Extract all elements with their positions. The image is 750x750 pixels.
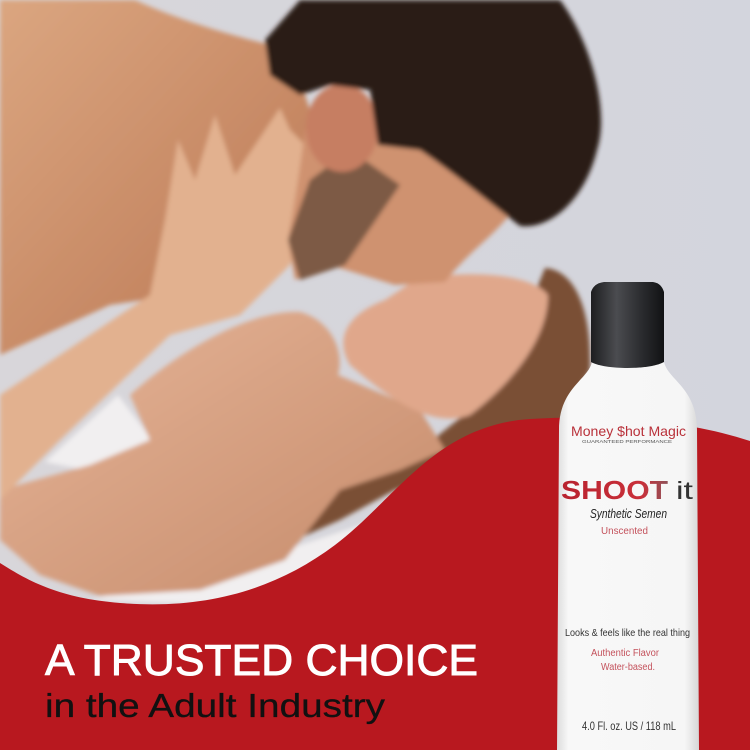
arm, lower figure <box>0 108 318 500</box>
photo: abstract colour masses <box>0 0 601 605</box>
long brown hair <box>295 268 590 540</box>
volume: 4.0 Fl. oz. US / 118 mL <box>582 719 676 733</box>
brand name: Money $hot Magic <box>571 423 686 439</box>
base label: Water-based. <box>601 662 655 673</box>
flavor label: Authentic Flavor <box>591 648 660 659</box>
beard <box>288 150 400 280</box>
product type: Synthetic Semen <box>590 506 667 521</box>
ear <box>306 84 378 172</box>
subheading: in the Adult Industry <box>45 687 386 724</box>
short dark hair <box>265 0 601 226</box>
product name: SHOOT <box>561 475 668 505</box>
torso and neck, lower figure <box>0 312 445 596</box>
bottle cap <box>591 282 664 368</box>
headline: A TRUSTED CHOICE <box>45 636 478 685</box>
bottle body <box>557 362 699 750</box>
product bottle <box>557 282 699 750</box>
product name suffix: it <box>676 477 693 505</box>
bed sheet <box>45 395 370 605</box>
torso, upper figure <box>0 0 330 355</box>
product claim: Looks & feels like the real thing <box>565 627 690 639</box>
face, lower figure <box>343 274 548 419</box>
face, upper figure <box>288 122 512 285</box>
brand tagline: GUARANTEED PERFORMANCE <box>582 439 672 444</box>
scent label: Unscented <box>601 525 648 537</box>
red wave panel <box>0 418 750 750</box>
